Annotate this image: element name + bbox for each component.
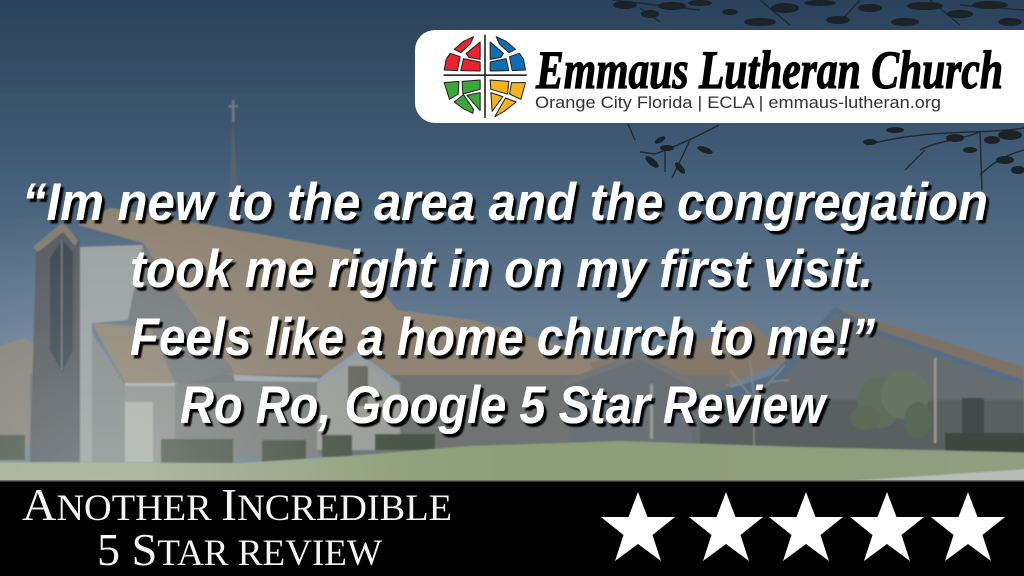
church steeple <box>227 100 241 235</box>
quote line 2: took me right in on my first visit. <box>130 240 873 299</box>
star 1 <box>601 492 675 561</box>
slope roof shadow <box>128 245 235 385</box>
church tagline: Orange City Florida | ECLA | emmaus-lutheran.org <box>535 93 941 112</box>
review quote <box>22 173 988 435</box>
right building fascia <box>688 307 1024 408</box>
star 4 <box>850 492 924 561</box>
palm and small tree <box>725 358 984 447</box>
mist overlay <box>0 200 560 502</box>
tower side wall <box>80 245 143 462</box>
quote line 3: Feels like a home church to me!” <box>130 308 875 367</box>
front gable <box>92 323 178 462</box>
header logo panel <box>415 30 1024 123</box>
main church roof <box>78 208 600 395</box>
banner heading line 1: ANOTHER INCREDIBLE <box>22 479 452 530</box>
center wall <box>175 380 318 462</box>
right building walls <box>680 315 1024 450</box>
right building roof <box>835 307 1024 380</box>
reviewer attribution: Ro Ro, Google 5 Star Review <box>180 376 828 435</box>
star 3 <box>769 492 843 561</box>
star 2 <box>689 492 763 561</box>
lawn <box>0 441 1024 502</box>
shrubs <box>0 433 1024 464</box>
bottom black banner <box>0 479 1024 576</box>
tree branches at top right <box>612 0 1024 190</box>
tower <box>30 222 80 462</box>
background building at left <box>0 338 45 445</box>
banner heading line 2: 5 STAR REVIEW <box>97 524 382 575</box>
center gable with stained window <box>317 351 400 450</box>
rear roof peak <box>590 320 790 392</box>
star 5 <box>931 492 1005 561</box>
middle gable building <box>560 352 695 445</box>
icon: ELCA cross and globe logo <box>443 35 527 118</box>
driveway <box>835 468 1024 502</box>
base wall behind all <box>30 375 730 455</box>
five star rating <box>601 492 1005 561</box>
